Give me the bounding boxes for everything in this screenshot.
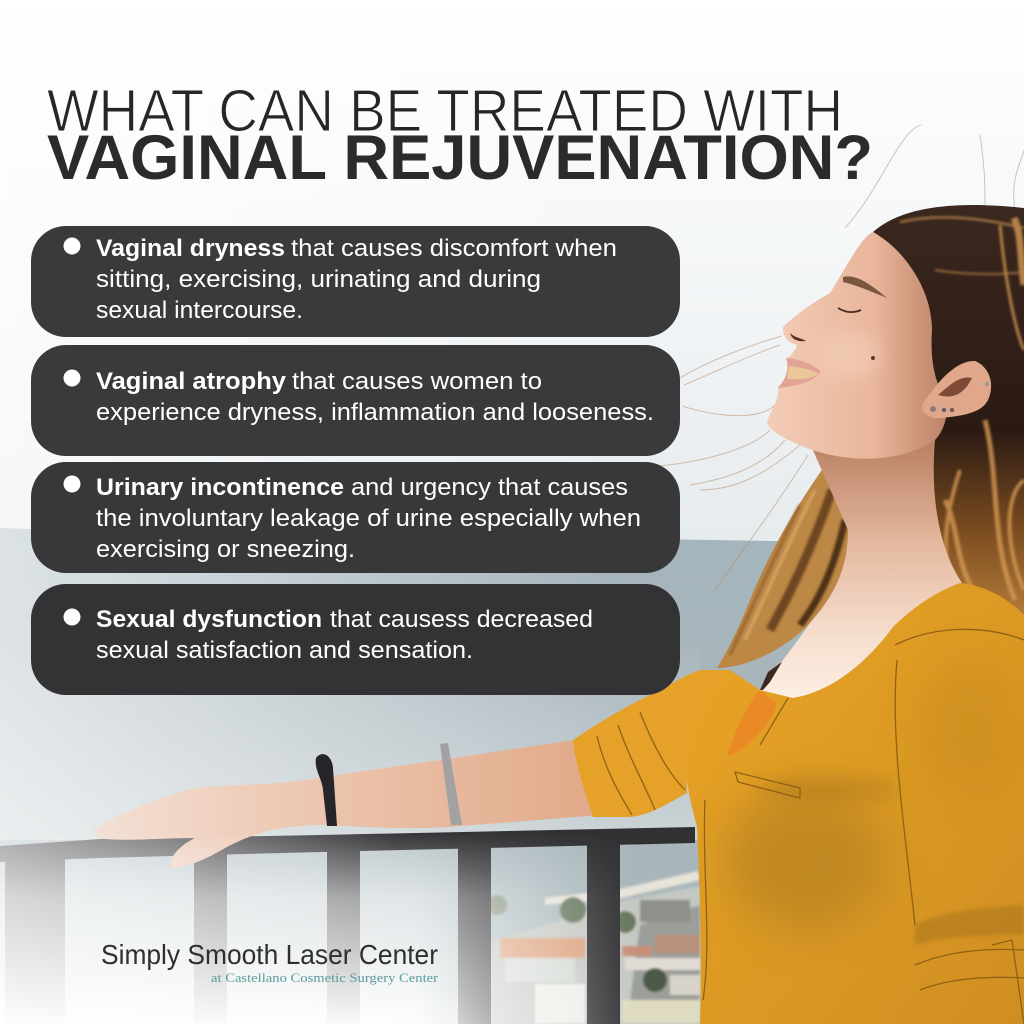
panel: sexual dysfunction <box>31 584 680 695</box>
panel: urinary incontinence: exercising or sneezing. <box>96 536 355 563</box>
railing <box>0 827 695 1024</box>
mouth <box>778 358 821 388</box>
panel: sexual dysfunction: Sexual dysfunction <box>96 606 322 633</box>
woman <box>573 125 1024 1024</box>
logo: Simply Smooth Laser Center <box>101 939 438 970</box>
panel: vaginal atrophy <box>31 345 680 456</box>
hair streaks left of neck <box>730 490 845 655</box>
icon: black wrist bangle <box>316 754 337 826</box>
cheek highlight <box>820 331 880 379</box>
logo <box>101 939 439 985</box>
windblown hair strands <box>660 125 1024 590</box>
bottom-left fade <box>0 830 640 1024</box>
shirt body <box>687 583 1024 1024</box>
panel: vaginal atrophy: Vaginal atrophy <box>96 368 287 395</box>
panel: urinary incontinence: Urinary incontinence <box>96 474 344 501</box>
ear <box>922 361 991 418</box>
panel: urinary incontinence: the involuntary leakage of urine especially when <box>96 505 641 532</box>
hair falling left of neck <box>717 463 850 668</box>
background: sea <box>0 528 1024 1024</box>
logo: at Castellano Cosmetic Surgery Center <box>211 970 439 985</box>
panel: vaginal atrophy: that causes women to <box>292 368 542 395</box>
nostril <box>790 333 806 341</box>
closed eye <box>838 308 861 312</box>
shirt shading <box>725 660 1024 945</box>
eyebrow <box>843 276 887 298</box>
panel: sexual dysfunction: sexual satisfaction and sensation. <box>96 637 473 664</box>
panel: urinary incontinence: and urgency that causes <box>351 474 628 501</box>
mole <box>871 356 875 360</box>
background: sky <box>0 0 1024 545</box>
panel: vaginal dryness: Vaginal dryness <box>96 235 285 262</box>
orange hair streaks, right side <box>900 217 1024 600</box>
background: white wash over the left side <box>0 0 620 1024</box>
panel: vaginal dryness <box>31 226 680 337</box>
panel: sexual dysfunction: that causess decreased <box>330 606 593 633</box>
panel: vaginal dryness: that causes discomfort when <box>291 235 617 262</box>
face <box>767 232 947 459</box>
sleeve <box>573 670 730 817</box>
title line 1: WHAT CAN BE TREATED WITH <box>47 78 843 144</box>
title line 2: VAGINAL REJUVENATION? <box>47 123 873 193</box>
title <box>47 78 873 193</box>
arm and hand <box>92 740 600 868</box>
panel: vaginal atrophy: experience dryness, inflammation and looseness. <box>96 399 654 426</box>
V-neck opening <box>727 690 777 757</box>
panel: vaginal dryness: sitting, exercising, urinating and during <box>96 266 541 293</box>
icon: silver bracelet <box>440 743 462 825</box>
background: wash over lower sea <box>0 640 700 840</box>
shirt folds <box>597 629 1024 1024</box>
inner dark neckline <box>760 662 782 690</box>
background: coastal town <box>440 871 705 1024</box>
neck and chest <box>760 440 962 703</box>
back hair mass <box>873 205 1024 615</box>
panel: vaginal dryness: sexual intercourse. <box>96 297 303 324</box>
panel: urinary incontinence <box>31 462 680 573</box>
